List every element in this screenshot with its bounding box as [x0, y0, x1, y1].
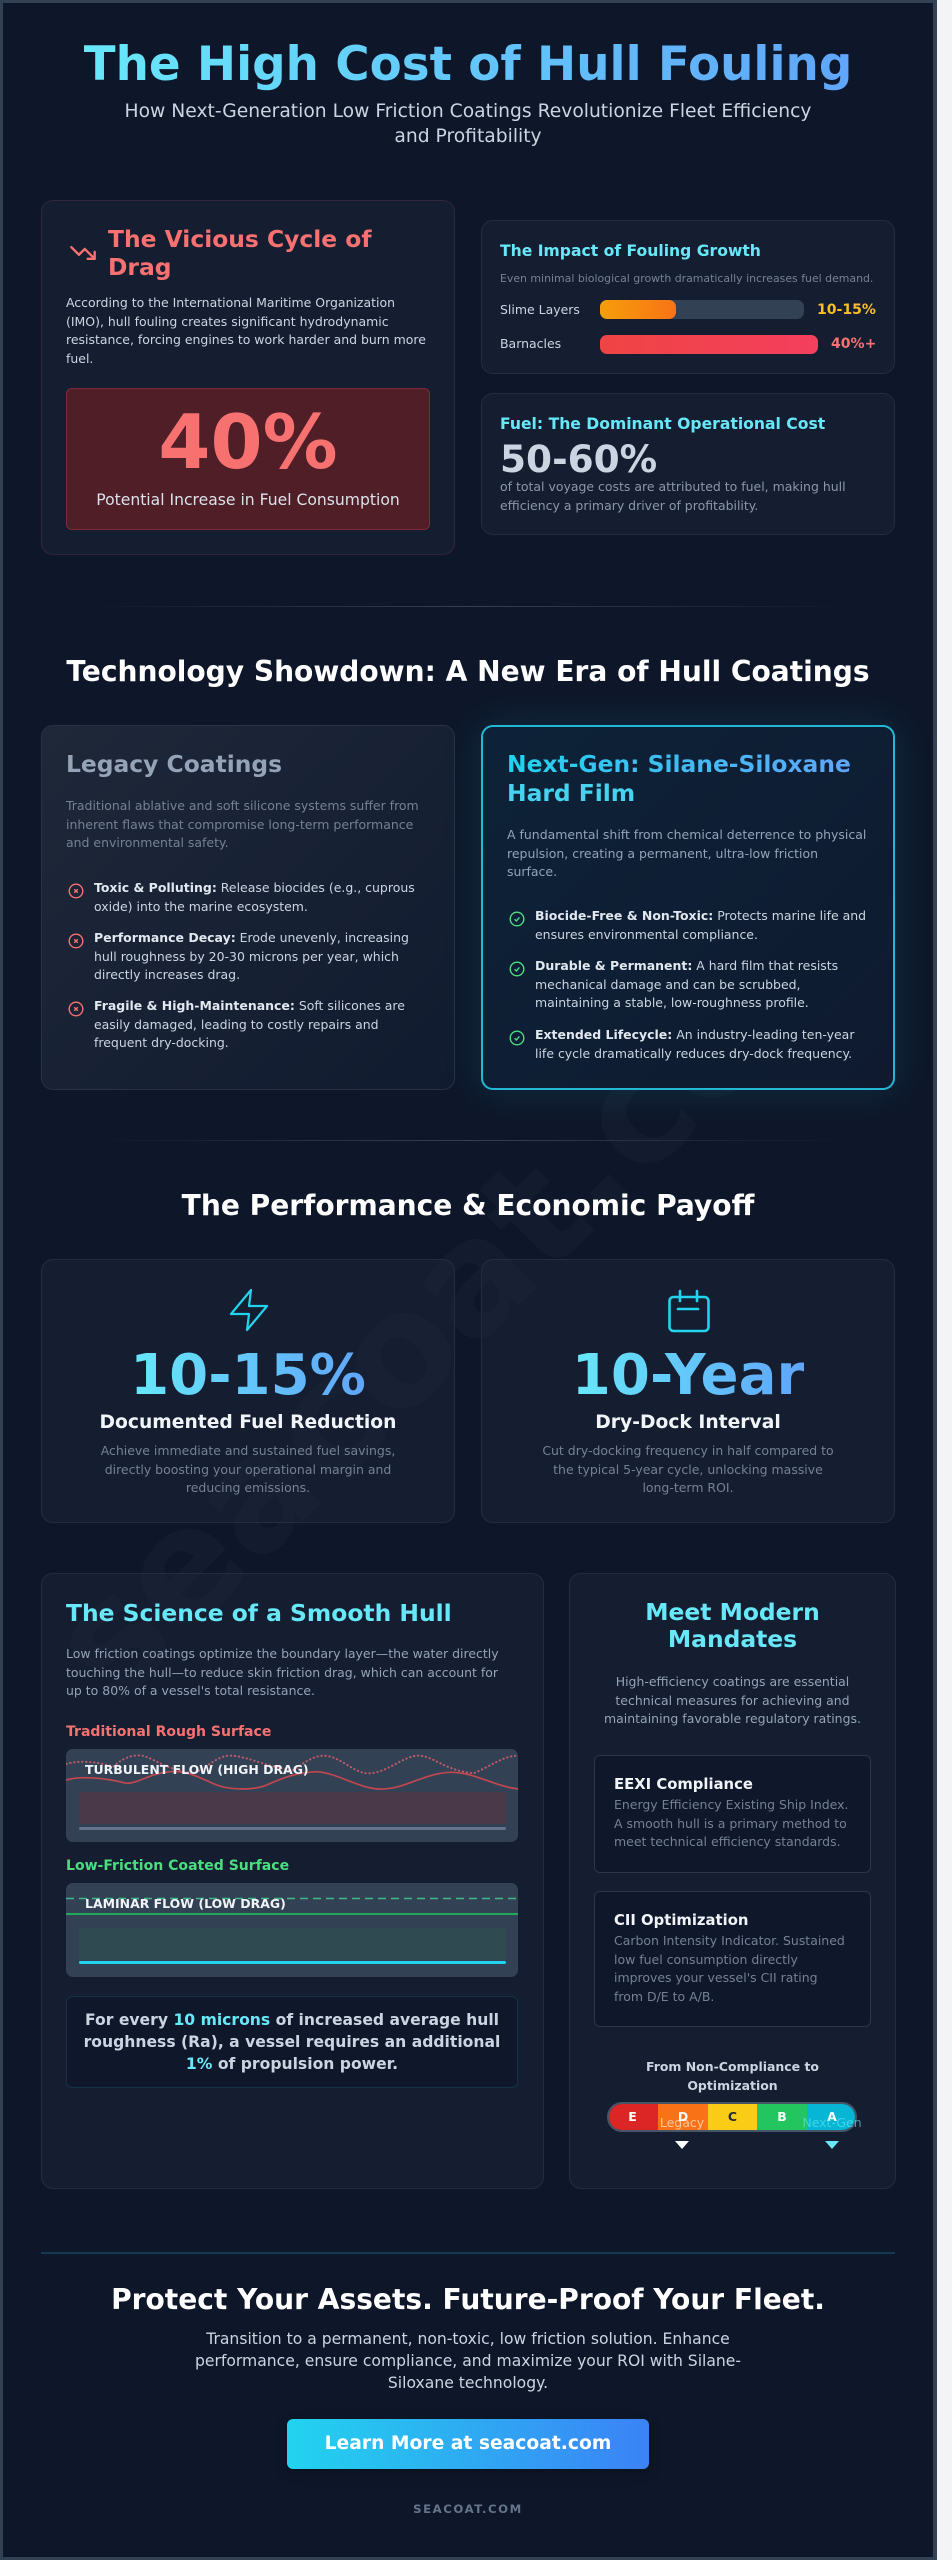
text: Cut dry-docking frequency in half compared to [542, 1443, 834, 1458]
button: learn more [287, 2419, 649, 2469]
text: reducing emissions. [186, 1480, 310, 1495]
diagram: rough surface flow [66, 1749, 518, 1842]
item: durable [510, 958, 838, 1010]
panel: science of smooth hull [41, 1573, 544, 2189]
label: Dry-Dock Interval [595, 1412, 781, 1433]
heading [645, 1598, 820, 1653]
bar: slime layers: 10-15% [817, 302, 876, 318]
text: directly boosting your operational margin and [105, 1462, 391, 1477]
icon: check circle [510, 1030, 524, 1046]
heading [507, 750, 851, 806]
text: Even minimal biological growth dramatically increases fuel demand. [500, 272, 873, 285]
text: technical measures for achieving and [615, 1693, 850, 1708]
text: IMO paragraph: According to the International Maritime Organization [66, 295, 395, 310]
heading: vicious cycle [108, 225, 372, 281]
panel: impact of fouling growth [481, 220, 895, 374]
heading: Mandates [668, 1625, 797, 1653]
legacy marker: Legacy [660, 2115, 704, 2130]
heading: Hard Film [507, 778, 635, 806]
panel: fuel dominant cost [481, 393, 895, 535]
item: extended lifecycle [510, 1027, 854, 1061]
stat 10-year: 10-Year [572, 1343, 804, 1408]
diagram: coated surface flow [66, 1883, 518, 1977]
text: seacoat.com [13, 825, 923, 1735]
text: low fuel consumption directly [614, 1952, 798, 1967]
text: A fundamental shift from chemical deterrence to physical [507, 827, 866, 842]
text: High-efficiency coatings are essential [616, 1674, 849, 1689]
text: of total voyage costs are attributed to fuel, making hull [500, 479, 846, 494]
big number 40%: 40% [158, 399, 338, 486]
callout: roughness rule [66, 1996, 518, 2088]
text [66, 1646, 499, 1698]
laminar lines [66, 1898, 518, 1915]
rating scale: A [827, 2109, 837, 2124]
stat 10-15%: 10-15% [130, 1343, 366, 1408]
heading: Fuel: The Dominant Operational Cost [500, 415, 825, 433]
text: Low friction coatings optimize the boundary layer—the water directly [66, 1646, 499, 1661]
text: Traditional ablative and soft silicone systems suffer from [66, 798, 419, 813]
text: touching the hull—to reduce skin friction drag, which can account for [66, 1665, 498, 1680]
item: fragile: Fragile & High-Maintenance: Soft silicones are [94, 998, 405, 1013]
stat 50-60%: 50-60% [500, 437, 657, 481]
text: from D/E to A/B. [614, 1989, 714, 2004]
text: long-term ROI. [642, 1480, 734, 1495]
text: Achieve immediate and sustained fuel savings, [101, 1443, 395, 1458]
section heading: performance payoff: The Performance & Economic Payoff [182, 1189, 754, 1222]
subtitle: and Profitability [394, 126, 542, 147]
bar: barnacles [500, 335, 876, 354]
footer text: Transition to a permanent, non-toxic, low friction solution. Enhance [206, 2330, 730, 2348]
item: durable: maintaining a stable, low-roughness profile. [535, 995, 809, 1010]
text: Energy Efficiency Existing Ship Index. [614, 1797, 848, 1812]
subheading: non-compliance to optimization: From Non-Compliance to [646, 2059, 819, 2074]
title: CII Optimization [614, 1912, 748, 1929]
item: performance decay: directly increases drag. [94, 967, 240, 982]
panel: modern mandates [569, 1573, 896, 2189]
icon: calendar [668, 1290, 710, 1332]
footer heading: Protect Your Assets. Future-Proof Your Fleet. [111, 2283, 825, 2316]
panel: legacy coatings [41, 725, 455, 1090]
heading: Next-Gen: Silane-Siloxane [507, 750, 851, 778]
text [500, 479, 846, 513]
panel: dry-dock interval [481, 1259, 895, 1523]
item: toxic: Toxic & Polluting: Release biocides (e.g., cuprous [94, 880, 415, 895]
box: EEXI [594, 1755, 871, 1873]
button: learn more: Learn More at seacoat.com [325, 2433, 611, 2454]
text [604, 1674, 861, 1726]
text: IMO paragraph: fuel. [66, 351, 93, 366]
panel: fuel reduction [41, 1259, 455, 1523]
subheading: non-compliance to optimization: Optimization [687, 2078, 778, 2093]
text: repulsion, creating a permanent, ultra-low friction [507, 846, 818, 861]
foul layer band [79, 1792, 506, 1824]
subheading: non-compliance to optimization [646, 2059, 819, 2093]
item: biocide-free [510, 908, 866, 942]
substrate line [79, 1827, 506, 1830]
text: inherent flaws that compromise long-term performance [66, 817, 413, 832]
text: improves your vessel's CII rating [614, 1970, 818, 1985]
text: surface. [507, 864, 557, 879]
heading: Meet Modern [645, 1598, 820, 1626]
rating scale: D [678, 2109, 688, 2124]
item: fragile: easily damaged, leading to costly repairs and [94, 1017, 379, 1032]
item: durable: mechanical damage and can be scrubbed, [535, 977, 800, 992]
item: extended lifecycle: life cycle dramatically reduces dry-dock frequency. [535, 1046, 852, 1061]
text: up to 80% of a vessel's total resistance. [66, 1683, 315, 1698]
item: biocide-free: Biocide-Free & Non-Toxic: Protects marine life and [535, 908, 866, 923]
text [100, 1443, 395, 1495]
item: performance decay: Performance Decay: Erode unevenly, increasing [94, 930, 409, 945]
callout: 40 percent [66, 388, 430, 530]
flow label: LAMINAR FLOW (LOW DRAG) [85, 1896, 286, 1911]
heading: The Science of a Smooth Hull [66, 1599, 452, 1627]
callout: roughness rule: roughness (Ra), a vessel requires an additional [84, 2033, 500, 2051]
bar: slime layers: Slime Layers [500, 302, 580, 317]
heading: Legacy Coatings [66, 750, 282, 778]
flow label: TURBULENT FLOW (HIGH DRAG) [85, 1762, 309, 1777]
title: EEXI Compliance [614, 1776, 753, 1793]
icon: x circle [68, 934, 84, 948]
label: Documented Fuel Reduction [100, 1412, 396, 1433]
footer brand: SEACOAT.COM [413, 2502, 523, 2516]
icon: x circle [68, 1002, 84, 1016]
label: rough surface: Traditional Rough Surface [66, 1724, 271, 1740]
legacy marker [660, 2115, 704, 2149]
icon: check circle [510, 912, 524, 926]
text: IMO paragraph: (IMO), hull fouling creates significant hydrodynamic [66, 314, 389, 329]
icon: trending down [70, 246, 96, 260]
text: IMO paragraph: resistance, forcing engines to work harder and burn more [66, 332, 426, 347]
label: coated surface: Low-Friction Coated Surface [66, 1858, 289, 1874]
footer text: Siloxane technology. [388, 2374, 548, 2392]
text [542, 1443, 834, 1495]
text: meet technical efficiency standards. [614, 1834, 841, 1849]
item: durable: Durable & Permanent: A hard film that resists [535, 958, 838, 973]
text: maintaining favorable regulatory ratings. [604, 1711, 861, 1726]
bar: slime layers [500, 300, 876, 319]
icon: lightning [230, 1288, 268, 1332]
heading: vicious cycle: Drag [108, 253, 171, 281]
heading: The Impact of Fouling Growth [500, 242, 761, 260]
text: IMO paragraph [66, 295, 426, 366]
section heading: technology showdown: Technology Showdown: A New Era of Hull Coatings [66, 655, 870, 688]
subtitle: How Next-Generation Low Friction Coatings Revolutionize Fleet Efficiency [125, 101, 811, 122]
item: toxic: oxide) into the marine ecosystem. [94, 899, 308, 914]
cyan substrate line [79, 1961, 506, 1964]
text: efficiency a primary driver of profitability. [500, 498, 758, 513]
footer text [0, 2329, 936, 2395]
footer text: performance, ensure compliance, and maximize your ROI with Silane- [195, 2352, 741, 2370]
next-gen marker [802, 2115, 862, 2149]
item: biocide-free: ensures environmental compliance. [535, 927, 758, 942]
rating scale: B [777, 2109, 787, 2124]
turbulence lines [66, 1754, 518, 1790]
text: the typical 5-year cycle, unlocking massive [553, 1462, 823, 1477]
text [66, 798, 419, 850]
item: performance decay [68, 930, 409, 982]
callout: roughness rule: 1% of propulsion power. [186, 2055, 398, 2073]
item: fragile: frequent dry-docking. [94, 1035, 229, 1050]
text [614, 1797, 848, 1849]
panel: next-gen film [481, 725, 895, 1090]
item: extended lifecycle: Extended Lifecycle: An industry-leading ten-year [535, 1027, 854, 1042]
callout: roughness rule: For every 10 microns of increased average hull [85, 2011, 499, 2029]
rating scale: C [728, 2109, 737, 2124]
item: toxic [68, 880, 415, 914]
text: and environmental safety. [66, 835, 229, 850]
item: fragile [68, 998, 405, 1050]
icon: check circle [510, 962, 524, 976]
panel: vicious cycle of drag [41, 200, 455, 555]
subtitle [125, 101, 811, 147]
box: CII [594, 1891, 871, 2027]
text: A smooth hull is a primary method to [614, 1816, 847, 1831]
coating band [79, 1928, 506, 1960]
next-gen marker: Next-Gen [802, 2115, 862, 2130]
text [614, 1933, 845, 2004]
title: The High Cost of Hull Fouling [84, 38, 852, 92]
rating scale [607, 2102, 862, 2149]
bar: barnacles: Barnacles [500, 336, 561, 351]
bar: barnacles: 40%+ [831, 336, 876, 352]
icon: x circle [68, 884, 84, 898]
text: Carbon Intensity Indicator. Sustained [614, 1933, 845, 1948]
rating scale: E [628, 2109, 637, 2124]
heading: vicious cycle: The Vicious Cycle of [108, 225, 372, 253]
text [507, 827, 866, 879]
callout label: Potential Increase in Fuel Consumption [96, 491, 400, 509]
item: performance decay: hull roughness by 20-30 microns per year, which [94, 949, 399, 964]
